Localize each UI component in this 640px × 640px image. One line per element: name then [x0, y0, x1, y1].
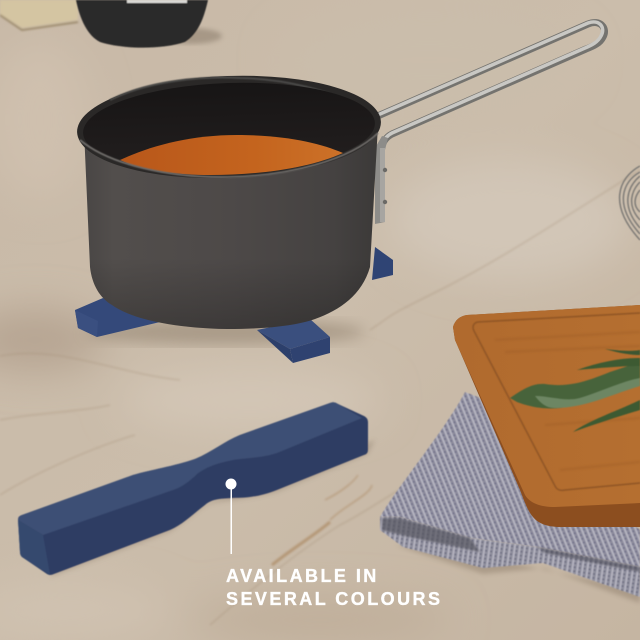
caption [226, 566, 442, 609]
board inner wood grain [495, 332, 640, 470]
soup [120, 135, 343, 175]
bar outline / front face [18, 402, 368, 575]
pan interior [82, 78, 376, 178]
cloth lower fold [380, 517, 640, 597]
caption: AVAILABLE IN [226, 566, 379, 586]
whisk at right edge [620, 166, 640, 240]
pot shadow [85, 319, 365, 345]
board side [453, 305, 640, 527]
bar top face [18, 402, 362, 535]
pan body [84, 125, 378, 329]
folded grey cloth [380, 392, 640, 603]
caption: SEVERAL COLOURS [226, 589, 442, 609]
cloth upper layer [380, 392, 640, 567]
trivet arm: back right [372, 247, 393, 280]
callout marker and leader line [226, 478, 236, 554]
board top surface [453, 305, 640, 507]
pan rim highlight [110, 78, 360, 108]
cloth fold shadow [382, 518, 480, 552]
wooden cutting board [453, 305, 640, 527]
pan handle [380, 22, 605, 150]
dark bowl at top [76, 0, 222, 48]
pan bracket with rivets [375, 136, 388, 224]
juice groove [473, 313, 640, 490]
trivet arm: left [75, 298, 160, 337]
bar end face [18, 520, 50, 575]
trivet: crossed blue silicone bars under pot [75, 247, 393, 363]
pan front lip [80, 133, 378, 177]
saucepan [75, 22, 605, 329]
tarragon herbs [510, 349, 640, 432]
book in top-left corner [0, 0, 78, 30]
blue silicone trivet bar [18, 402, 375, 577]
trivet arm: front right [257, 319, 330, 349]
pan rim [75, 71, 383, 183]
